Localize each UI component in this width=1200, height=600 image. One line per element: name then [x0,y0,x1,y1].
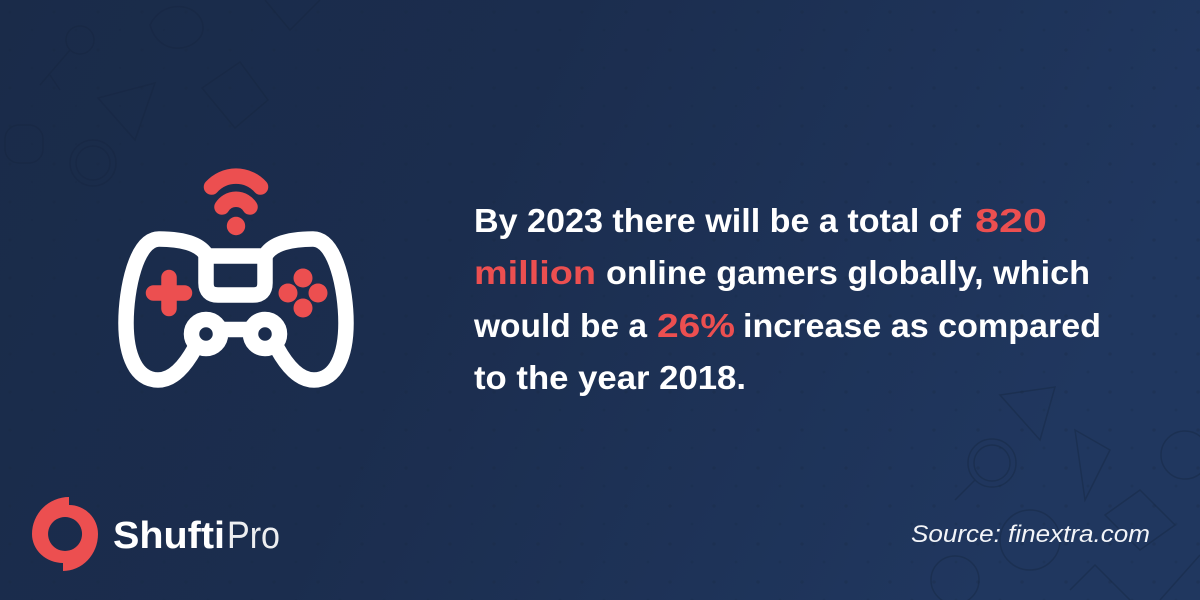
logo wordmark: Pro [227,515,280,557]
line 2: online gamers globally, which [606,254,1090,291]
line 1: By 2023 there will be a total of [474,202,962,239]
icon: action buttons [278,268,328,318]
logo wordmark: Shufti [113,515,225,557]
line 4: to the year 2018. [474,359,746,396]
logo wordmark [113,515,280,557]
icon: game controller with wifi [126,176,346,380]
line 3 [473,307,1101,344]
line 1: 820 [975,202,1047,239]
line 3: 26% [657,307,735,344]
logo: ShuftiPro [32,497,280,571]
icon: wifi signal [212,176,260,235]
statistic text [473,202,1101,396]
line 3: would be a [473,307,648,344]
line 3: increase as compared [743,307,1101,344]
icon: d-pad [154,278,184,308]
source citation: Source: finextra.com [911,521,1150,548]
logo mark [32,497,98,571]
line 2: million [474,254,596,291]
icon: controller body [126,239,346,380]
